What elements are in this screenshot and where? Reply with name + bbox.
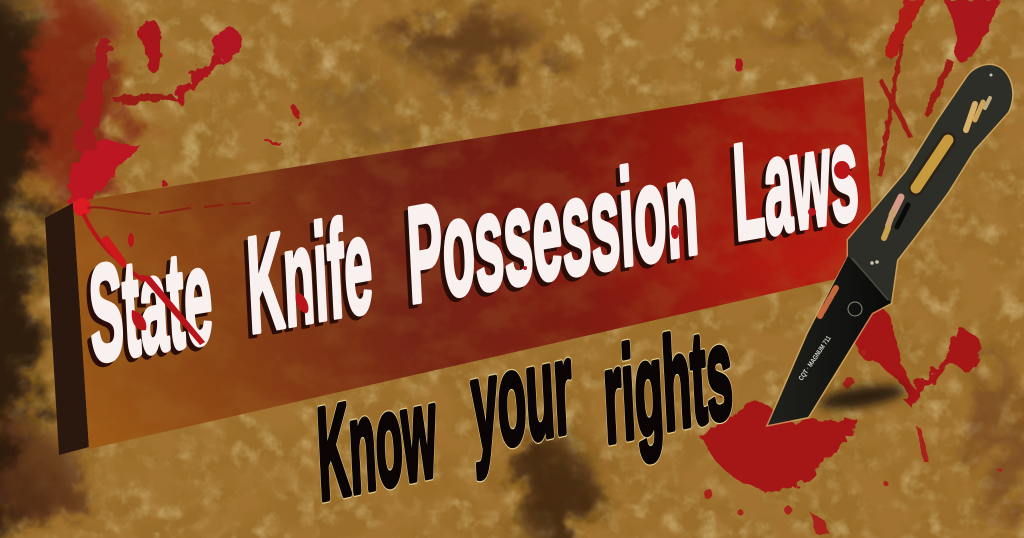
blood pool under knife [700,300,982,490]
knife handle [848,65,1012,303]
title: State Knife Possession Laws [82,96,861,396]
banner ribbon [40,70,880,460]
knife bolster line [852,258,888,300]
subtitle: Know your rights [314,298,735,528]
knife blade [768,256,891,425]
title lettering [86,96,861,392]
knife outline glow [768,65,1012,425]
title lettering: State [86,219,215,392]
blood drops: bottom right [703,349,1002,534]
text: rights [600,298,735,471]
title shadow: Knife [240,192,371,367]
subtitle halo: your [468,313,575,480]
subtitle lettering: your [468,313,575,480]
knife handle slots [884,98,990,238]
subtitle halo: Know [314,357,440,528]
blood splatter: top left [68,18,300,205]
black side bar [45,203,89,455]
icon: knife [768,65,1012,425]
text: rights [600,298,735,471]
knife engraving: CQT · MAGNUM 711 [798,335,833,382]
title lettering: Knife [244,188,375,363]
title shadow: State [82,223,211,396]
knife rivets [870,261,874,265]
knife blade markings [820,288,836,316]
subtitle lettering: Know [314,357,440,528]
title shadow [82,100,857,396]
knife shadow [817,380,907,414]
blood on banner [73,198,250,298]
blood on title [132,161,850,345]
blood splatter: top right [735,0,1000,178]
